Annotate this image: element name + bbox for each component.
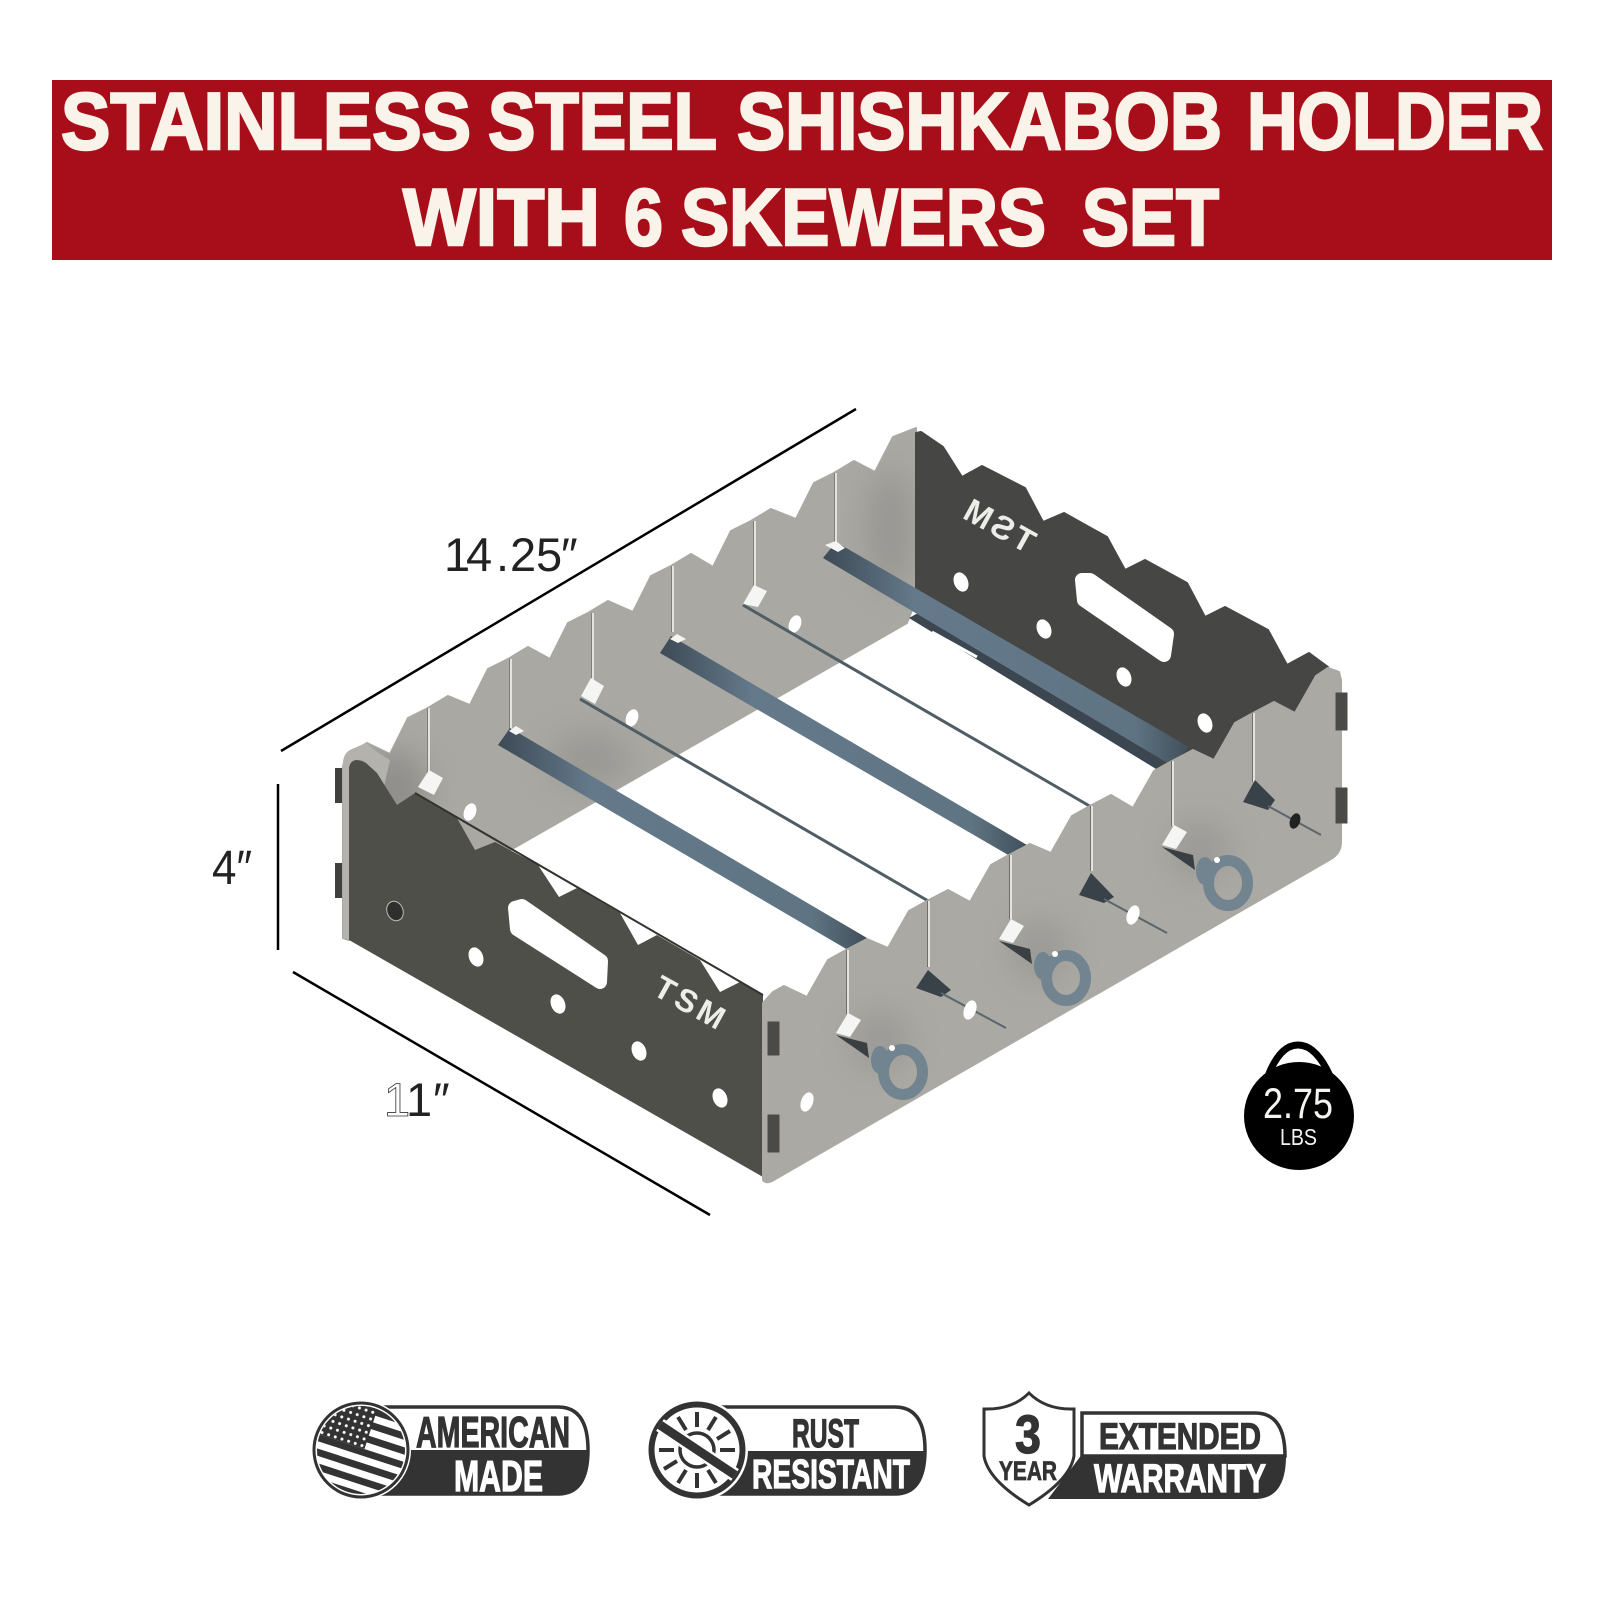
title line 2: SET [1082, 173, 1219, 263]
title line 1: SHISHKABOB [737, 77, 1222, 167]
badge: American made [288, 1379, 588, 1513]
width label: 1 [384, 1073, 410, 1126]
title line 2: WITH [403, 173, 600, 263]
badge: 3 year extended warranty [984, 1393, 1285, 1505]
title line 1: STEEL [488, 77, 717, 167]
label: Resistant: RESISTANT [752, 1451, 910, 1497]
dimension: width [293, 972, 710, 1215]
rear steel bar [823, 541, 1189, 772]
title line 1 [61, 77, 1543, 167]
height label: 4″ [212, 842, 252, 895]
skewer: flat bar 2 [660, 634, 1027, 856]
icon: crossed-out sun [646, 1399, 748, 1501]
label: Extended: EXTENDED [1099, 1416, 1261, 1457]
tabs on left end panel [335, 768, 342, 898]
length label: 14.25″ [444, 528, 578, 581]
panel: rear dark end [916, 432, 1328, 775]
skewer: thin rod 1 [580, 699, 930, 902]
skewer: flat bar 1 [498, 726, 867, 950]
width label: 1 [406, 1073, 432, 1126]
width label: ″ [433, 1073, 450, 1126]
title line 2 [403, 173, 1219, 263]
skewer tip 3 [1243, 780, 1321, 835]
label: 3: 3 [1015, 1405, 1041, 1465]
skewer end with ring 1 [836, 1013, 922, 1094]
title line 1: STAINLESS [61, 77, 471, 167]
label: Warranty: WARRANTY [1094, 1457, 1266, 1501]
skewer: thin rod 2 [743, 605, 1093, 808]
title line 2: 6 [624, 173, 663, 263]
weight unit: LBS [1280, 1124, 1317, 1150]
label: American: AMERICAN [416, 1408, 570, 1457]
skewer tip 2 [1079, 873, 1167, 933]
skewer tip 1 [916, 970, 1006, 1028]
panel: far long side [343, 428, 916, 940]
panel: front dark end [343, 743, 763, 1177]
badge: rust resistant [646, 1399, 925, 1501]
title line 2: SKEWERS [681, 173, 1046, 263]
label: Year: YEAR [999, 1456, 1057, 1486]
weight badge [1244, 1045, 1354, 1170]
product illustration: shishkabob holder [335, 428, 1347, 1182]
mirrored TSM mark: TSM [955, 490, 1042, 560]
skewer end with ring 3 [1162, 825, 1248, 906]
dimension: length [281, 409, 856, 751]
icon: American flag [312, 1402, 411, 1498]
skewer end with ring 2 [999, 919, 1086, 1000]
icon: shield [984, 1393, 1074, 1505]
weight value: 2.75 [1263, 1080, 1333, 1128]
panel: near long side [763, 668, 1347, 1182]
label: Made: MADE [454, 1452, 543, 1501]
title banner [52, 77, 1552, 263]
label: Rust: RUST [792, 1412, 859, 1456]
title line 1: HOLDER [1247, 77, 1543, 167]
TSM mark: TSM [648, 968, 735, 1038]
